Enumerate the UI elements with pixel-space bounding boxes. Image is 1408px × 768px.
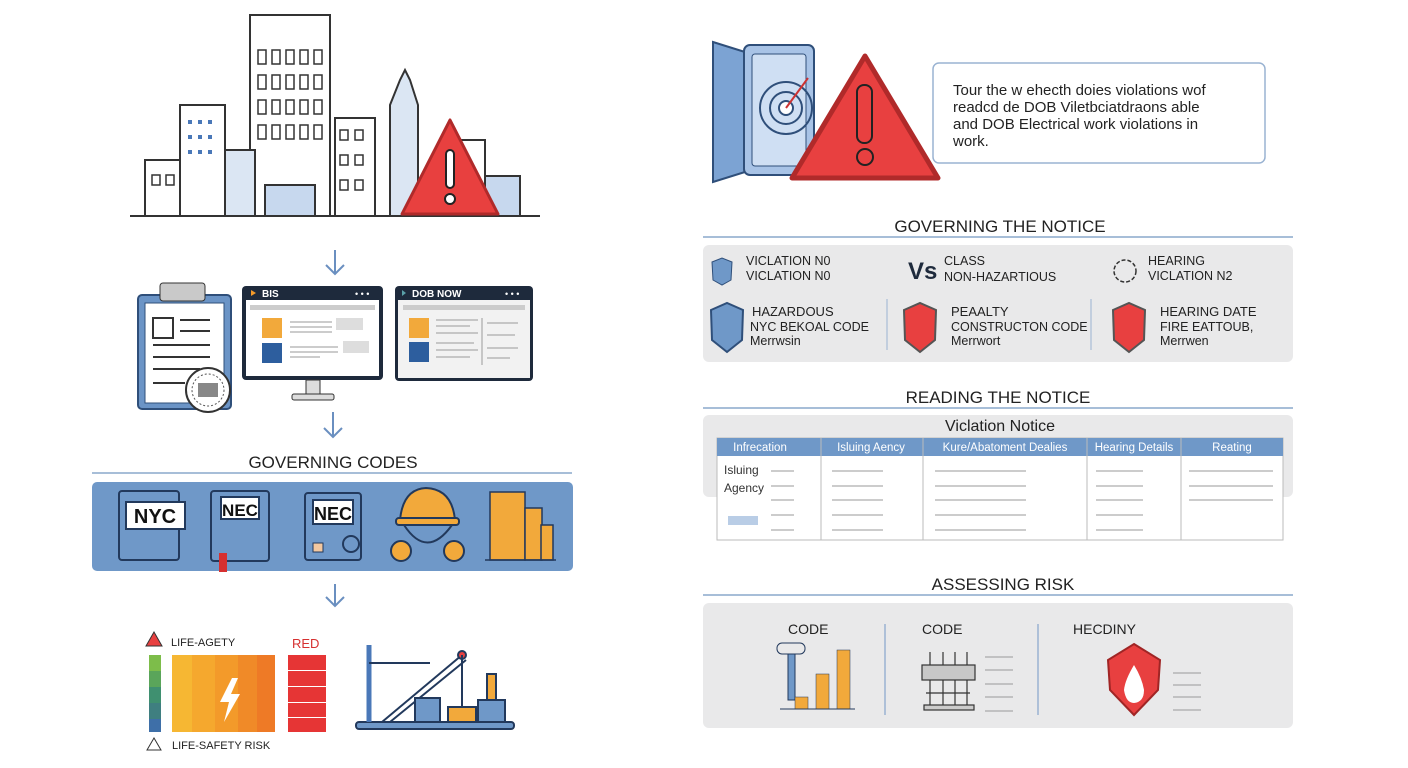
item: violation no: VICLATION N0 xyxy=(746,269,831,283)
panel: violation notice table: Isluing xyxy=(724,463,759,477)
item: penalty: PEAALTY xyxy=(951,304,1009,319)
item: hearing: HEARING xyxy=(1148,254,1205,268)
item: class: CLASS xyxy=(944,254,985,268)
chart: code bars: CODE xyxy=(788,621,828,637)
panel: violation notice table: Agency xyxy=(724,481,764,495)
icon: safe with warning xyxy=(713,42,938,182)
chart: life-safety risk scale: RED xyxy=(292,636,319,651)
text block: intro box xyxy=(933,63,1265,163)
item: penalty: Merrwort xyxy=(951,334,1001,348)
panel: violation notice table: Reating xyxy=(1212,442,1252,454)
icon: crane construction xyxy=(356,645,514,729)
text block: intro box: readcd de DOB Viletbciatdraons able xyxy=(953,99,1200,116)
panel: violation notice table: Kure/Abatoment Dealies xyxy=(943,442,1068,454)
heading: governing the notice: GOVERNING THE NOTICE xyxy=(894,217,1106,236)
item: hearing date: FIRE EATTOUB, xyxy=(1160,320,1253,334)
heading: reading the notice: READING THE NOTICE xyxy=(906,388,1090,407)
chart: code bars xyxy=(777,621,855,709)
item: class xyxy=(908,254,1056,285)
icon: building xyxy=(485,492,556,560)
chart: life-safety risk scale xyxy=(146,632,326,752)
panel: violation notice table: Viclation Notice xyxy=(945,418,1055,435)
heading: governing codes: GOVERNING CODES xyxy=(248,453,418,472)
icon: NEC panel: NEC xyxy=(314,504,352,524)
arrow: down 2 xyxy=(324,412,342,437)
chart: life-safety risk scale: LIFE-SAFETY RISK xyxy=(172,740,271,752)
item: hazardous: NYC BEKOAL CODE xyxy=(750,320,869,334)
panel: DOB NOW window xyxy=(395,286,533,381)
panel: BIS monitor: • • • xyxy=(355,289,369,299)
icon: fire shield xyxy=(1073,621,1201,715)
panel: governing codes icons xyxy=(92,482,573,572)
item: hearing date: Merrwen xyxy=(1160,334,1209,348)
icon: NYC book: NYC xyxy=(134,506,176,528)
panel: violation notice table: Hearing Details xyxy=(1095,442,1174,454)
panel: assessing risk xyxy=(703,603,1293,728)
panel: violation notice table: Infrecation xyxy=(733,442,787,454)
arrow: down 1 xyxy=(326,250,344,274)
icon: code panel grid: CODE xyxy=(922,621,962,637)
panel: BIS monitor xyxy=(242,286,383,400)
text block: intro box: and DOB Electrical work violations in xyxy=(953,116,1198,133)
icon: NEC panel xyxy=(305,493,361,560)
icon: NEC book xyxy=(211,491,269,572)
text block: intro box: Tour the w ehecth doies violations wof xyxy=(953,82,1206,99)
icon: NYC book xyxy=(119,491,185,560)
item: hearing: VICLATION N2 xyxy=(1148,269,1233,283)
chart: life-safety risk scale: LIFE-AGETY xyxy=(171,637,236,649)
item: hearing xyxy=(1114,254,1233,283)
item: hearing date: HEARING DATE xyxy=(1160,304,1257,319)
icon: code panel grid xyxy=(922,621,1013,711)
heading: assessing risk: ASSESSING RISK xyxy=(932,575,1075,594)
item: class: NON-HAZARTIOUS xyxy=(944,270,1056,284)
item: hearing date xyxy=(1113,303,1257,352)
panel: BIS monitor: BIS xyxy=(262,289,279,300)
panel: violation notice table: Isluing Aency xyxy=(837,442,905,454)
arrow: down 3 xyxy=(326,584,344,606)
item: penalty: CONSTRUCTON CODE xyxy=(951,320,1088,334)
item: violation no xyxy=(712,254,831,285)
icon: fire shield: HECDINY xyxy=(1073,621,1137,637)
item: hazardous xyxy=(711,303,869,352)
icon: NEC book: NEC xyxy=(222,501,258,520)
panel: violation notice table xyxy=(703,415,1293,540)
item: hazardous: HAZARDOUS xyxy=(752,304,834,319)
panel: DOB NOW window: • • • xyxy=(505,289,519,299)
panel: notice fields xyxy=(703,245,1293,362)
panel: DOB NOW window: DOB NOW xyxy=(412,289,462,300)
item: hazardous: Merrwsin xyxy=(750,334,801,348)
item: class: Vs xyxy=(908,258,937,285)
item: penalty xyxy=(904,303,1088,352)
text block: intro box: work. xyxy=(952,133,989,150)
item: violation no: VICLATION N0 xyxy=(746,254,831,268)
icon: clipboard with seal xyxy=(138,283,231,412)
icon: hard hat worker xyxy=(391,488,464,561)
icon: city skyline with warning xyxy=(130,15,540,216)
